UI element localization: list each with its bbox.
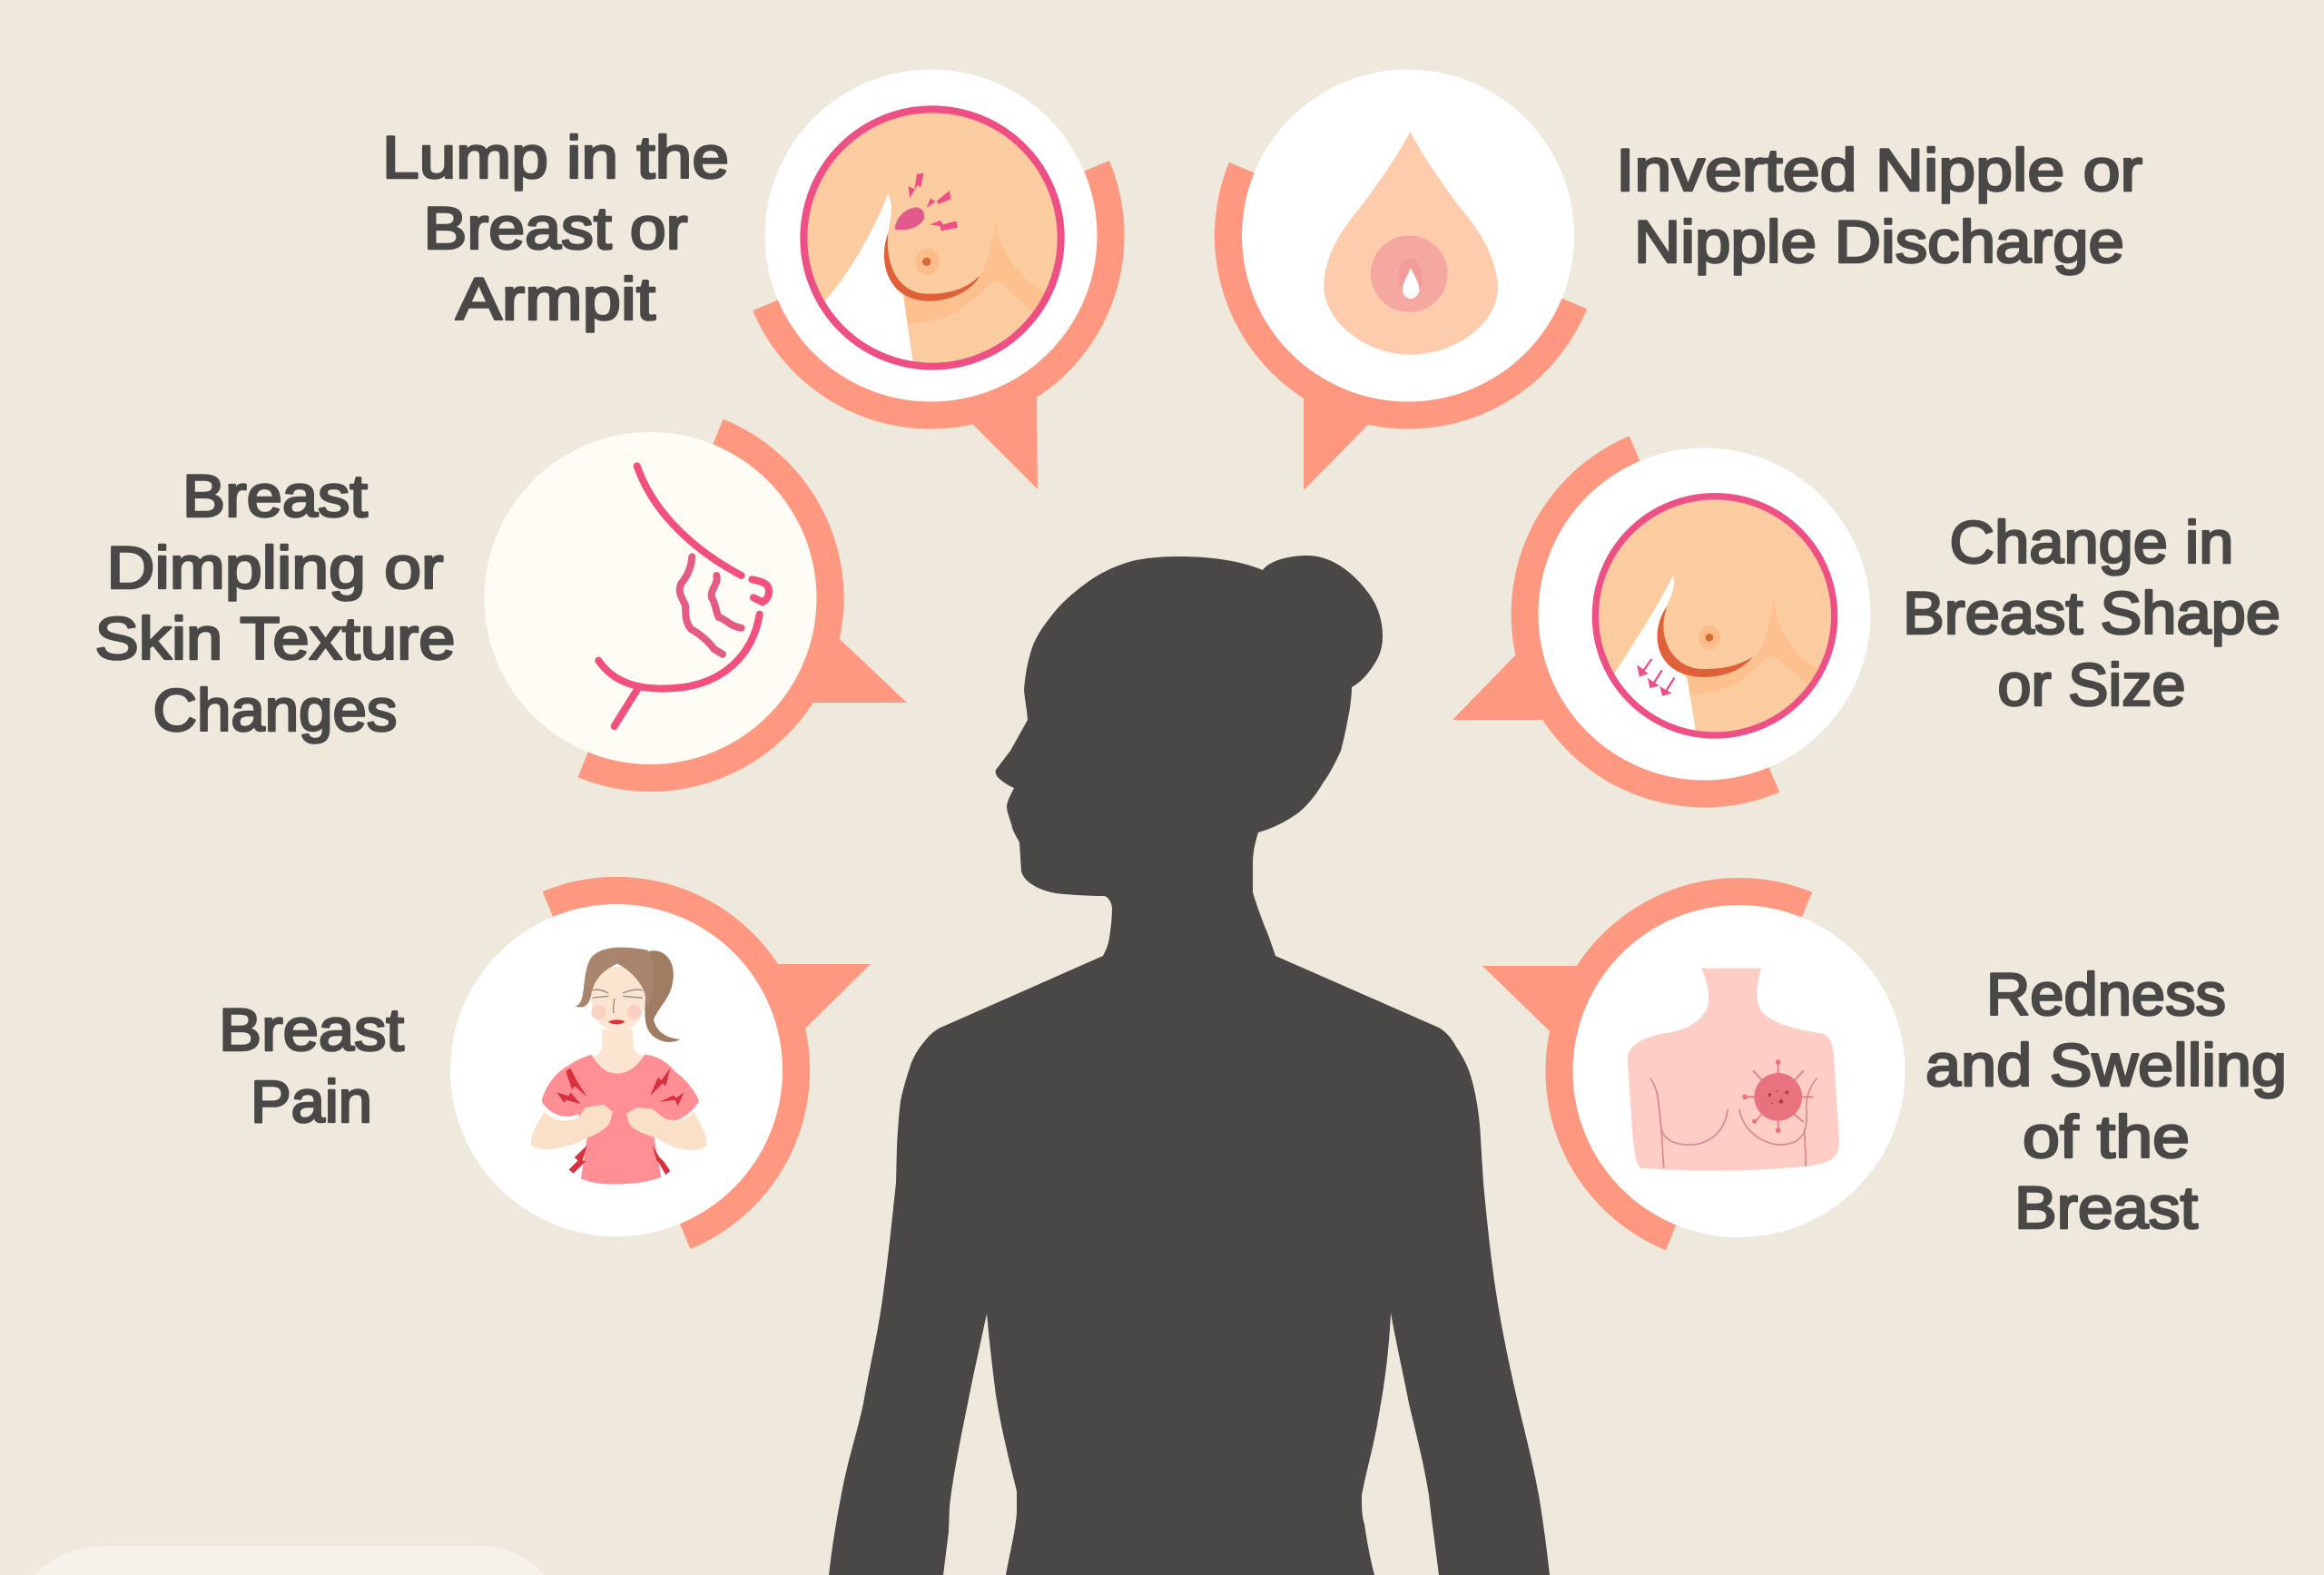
bottom pale panel <box>34 1546 545 1575</box>
text: changes: Changes <box>153 676 398 743</box>
text: breast: Breast <box>2014 1174 2198 1241</box>
pointer <box>1452 640 1571 720</box>
icon: breast with lump <box>803 108 1062 369</box>
heading: breast pain: Breast <box>219 996 404 1063</box>
text: armpit: Armpit <box>456 265 655 332</box>
speech ring <box>1215 162 1587 429</box>
icon: breast outline with dimpling <box>598 466 769 726</box>
text: skin texture: Skin Texture <box>94 605 455 672</box>
speech ring <box>1512 436 1779 807</box>
icon: woman in pain <box>531 948 707 1184</box>
text: or size: or Size <box>1997 651 2186 718</box>
heading: redness: Redness <box>1986 960 2226 1028</box>
cream disc <box>485 432 817 764</box>
white disc <box>1538 448 1870 781</box>
woman silhouette <box>829 556 1550 1575</box>
text: dimpling or: Dimpling or <box>107 534 444 601</box>
white disc <box>1572 905 1905 1237</box>
panel: inverted nipple <box>1215 69 1587 490</box>
pointer <box>1304 381 1389 490</box>
white disc <box>1242 69 1574 401</box>
text: pain: Pain <box>251 1068 372 1135</box>
panel: breast pain <box>450 877 871 1249</box>
speech ring <box>753 161 1125 429</box>
speech ring <box>1545 878 1812 1250</box>
panel: shape change <box>1452 436 1870 807</box>
panel: dimpling <box>485 419 907 792</box>
icon: nipple discharge <box>1324 132 1498 355</box>
heading: shape change: Change in <box>1950 508 2233 576</box>
speech ring <box>577 419 844 792</box>
pointer <box>781 623 907 703</box>
pointer <box>763 964 871 1053</box>
speech ring <box>543 877 810 1249</box>
icon: breast with arrows <box>1594 495 1836 742</box>
white disc <box>450 904 783 1236</box>
text: nipple discharge: Nipple Discharge <box>1634 208 2124 275</box>
pointer <box>944 381 1038 489</box>
white disc <box>764 69 1097 401</box>
text: and swelling: and Swelling <box>1925 1031 2287 1098</box>
icon: torso with red patch <box>1628 969 1839 1171</box>
panel: lump in the breast <box>753 69 1125 489</box>
heading: dimpling: Breast <box>182 462 368 529</box>
text: of the: of the <box>2023 1103 2190 1170</box>
text: breast or: Breast or <box>423 194 688 261</box>
pointer <box>1482 966 1589 1044</box>
panel: redness and swelling <box>1482 878 1905 1250</box>
heading: lump: Lump in the <box>382 123 729 191</box>
text: breast shape: Breast Shape <box>1903 579 2280 646</box>
heading: inverted nipple: Inverted Nipple or <box>1616 136 2142 203</box>
